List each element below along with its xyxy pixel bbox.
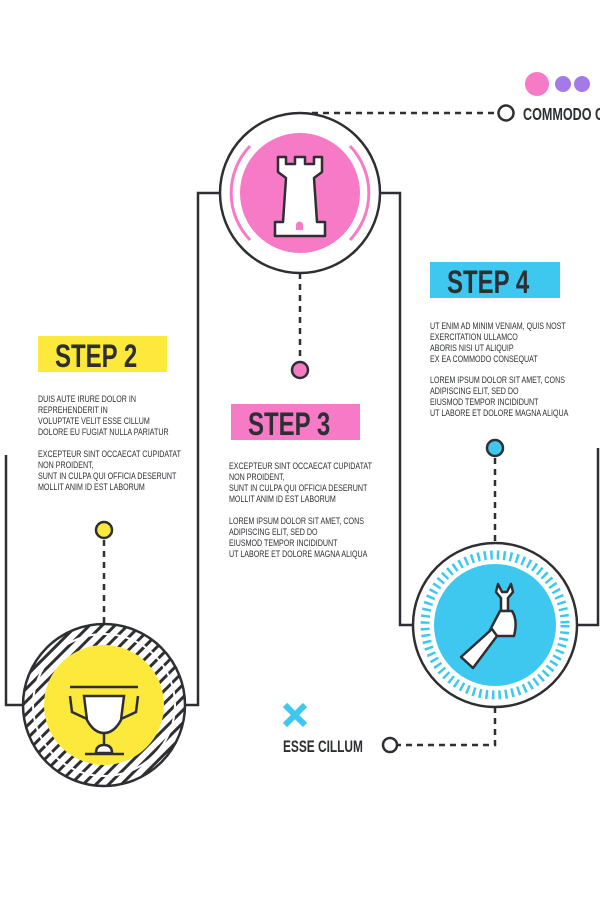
icon: trophy (70, 687, 138, 754)
heading: step 2: STEP 2 (55, 338, 137, 374)
text: step 3: EXCEPTEUR SINT OCCAECAT CUPIDATAT (229, 461, 372, 471)
icon: robotic arm wrench (461, 584, 516, 668)
heading: step 4: STEP 4 (447, 264, 529, 300)
text: step 4: ADIPISCING ELIT, SED DO (430, 386, 519, 396)
circle: trophy (23, 624, 185, 786)
icon: cross (285, 705, 305, 725)
text: step 3: EIUSMOD TEMPOR INCIDIDUNT (229, 538, 338, 548)
text: step 3: ADIPISCING ELIT, SED DO (229, 527, 318, 537)
circle: wrench arm (413, 543, 577, 707)
text: step 4: EIUSMOD TEMPOR INCIDIDUNT (430, 397, 539, 407)
text: step 2: NON PROIDENT, (38, 460, 94, 470)
dotted link trophy (96, 522, 112, 623)
text: step 4: UT LABORE ET DOLORE MAGNA ALIQUA (430, 408, 569, 418)
heading: step 3 (231, 404, 360, 442)
text: step 4: EXERCITATION ULLAMCO (430, 332, 518, 342)
connector path (6, 193, 598, 705)
text: step 2: DOLORE EU FUGIAT NULLA PARIATUR (38, 427, 169, 437)
label: esse cillum: ESSE CILLUM (283, 738, 363, 757)
dotted link blue (487, 440, 503, 543)
text: step 4: EX EA COMMODO CONSEQUAT (430, 354, 538, 364)
text: step 2: SUNT IN CULPA QUI OFFICIA DESERUNT (38, 471, 176, 481)
heading: step 2 (38, 336, 167, 374)
text: step 2: EXCEPTEUR SINT OCCAECAT CUPIDATAT (38, 449, 181, 459)
text: step 3: LOREM IPSUM DOLOR SIT AMET, CONS (229, 516, 364, 526)
text: step 3: SUNT IN CULPA QUI OFFICIA DESERUNT (229, 483, 367, 493)
text: step 4: LOREM IPSUM DOLOR SIT AMET, CONS (430, 375, 565, 385)
text: step 4: UT ENIM AD MINIM VENIAM, QUIS NOST (430, 321, 566, 331)
text: step 3: UT LABORE ET DOLORE MAGNA ALIQUA (229, 549, 368, 559)
heading: step 3: STEP 3 (248, 406, 330, 442)
text: step 2: VOLUPTATE VELIT ESSE CILLUM (38, 416, 150, 426)
text: step 3: MOLLIT ANIM ID EST LABORUM (229, 494, 336, 504)
decorative dots (525, 72, 590, 96)
text: step 2: REPREHENDERIT IN (38, 405, 108, 415)
text: step 2 (38, 394, 181, 492)
heading: step 4 (430, 262, 560, 300)
text: step 4: ABORIS NISI UT ALIQUIP (430, 343, 514, 353)
label: esse cillum (283, 707, 495, 757)
text: step 2: MOLLIT ANIM ID EST LABORUM (38, 482, 145, 492)
text: step 3: NON PROIDENT, (229, 472, 285, 482)
text: step 3 (229, 461, 372, 559)
icon: rook (275, 157, 325, 236)
dotted link step 1 (292, 273, 308, 378)
text: step 2: DUIS AUTE IRURE DOLOR IN (38, 394, 136, 404)
circle: step 1 rook (220, 113, 380, 273)
label: commodo (312, 105, 600, 125)
text: step 4 (430, 321, 569, 418)
